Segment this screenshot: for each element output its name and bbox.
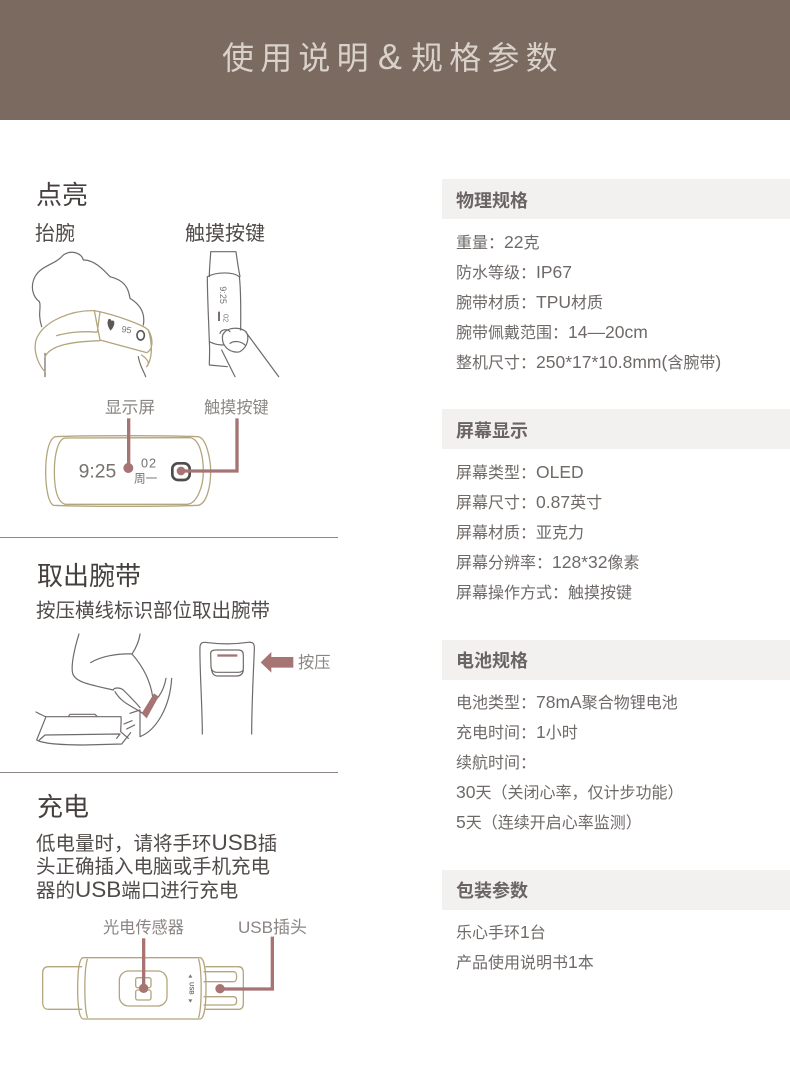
panel: charging	[36, 792, 307, 1019]
icon: strap back with press arrow	[200, 642, 293, 734]
spec list: 屏幕类型：OLED	[456, 462, 584, 482]
icon: touch key illustration: 02	[221, 314, 230, 322]
icon: USB charger illustration: USB	[188, 982, 194, 995]
label: USB plug: USB插头	[238, 918, 307, 937]
instruction text	[36, 830, 277, 902]
spec list: 防水等级：IP67	[456, 262, 572, 282]
panel: package contents	[442, 870, 790, 972]
label: touch key: 触摸按键	[204, 399, 269, 417]
spec list: 产品使用说明书1本	[456, 952, 594, 972]
spec list: 屏幕材质：亚克力	[456, 524, 584, 542]
icon: touch key illustration: 9:25	[218, 286, 228, 304]
panel: physical specs	[442, 179, 790, 372]
spec list: 电池类型：78mA聚合物锂电池	[456, 692, 678, 712]
spec list	[456, 692, 683, 832]
spec list: 屏幕分辨率：128*32像素	[456, 552, 640, 572]
header banner	[0, 0, 790, 120]
instruction text: 按压横线标识部位取出腕带	[36, 600, 270, 622]
spec list	[456, 232, 721, 372]
instruction text: 器的USB端口进行充电	[36, 877, 238, 902]
icon: removing strap illustration	[36, 634, 172, 745]
label: optical sensor: 光电传感器	[103, 919, 184, 937]
heading: package contents: 包装参数	[456, 880, 528, 901]
spec list: 整机尺寸：250*17*10.8mm(含腕带)	[456, 352, 721, 372]
panel: remove strap	[36, 561, 331, 745]
spec list: 腕带材质：TPU材质	[456, 292, 603, 312]
spec list: 重量：22克	[456, 232, 540, 252]
icon: touch key illustration	[207, 252, 279, 377]
label: display: 显示屏	[105, 398, 155, 417]
label: raise wrist: 抬腕	[35, 222, 75, 245]
icon: band front view with callouts: 9:25	[79, 461, 116, 482]
heading: remove strap: 取出腕带	[37, 561, 141, 591]
spec list: 30天（关闭心率，仅计步功能）	[456, 782, 683, 802]
heading: screen display: 屏幕显示	[456, 421, 528, 441]
icon: wrist illustration: 95	[121, 324, 132, 335]
panel: screen display	[442, 409, 790, 602]
spec list	[456, 922, 594, 972]
divider left 1	[0, 537, 338, 538]
icon: wrist illustration	[32, 252, 152, 377]
spec list: 充电时间：1小时	[456, 722, 578, 742]
spec list: 乐心手环1台	[456, 922, 546, 942]
heading: physical specs: 物理规格	[456, 191, 528, 211]
panel: light up	[32, 180, 279, 506]
title: 使用说明&规格参数	[222, 36, 564, 77]
spec list: 续航时间：	[456, 754, 536, 772]
icon: band front view with callouts	[46, 418, 237, 506]
instruction text: 低电量时，请将手环USB插	[36, 830, 277, 855]
spec list: 屏幕操作方式：触摸按键	[456, 584, 632, 602]
icon: USB charger illustration	[43, 937, 272, 1019]
instruction text: 头正确插入电脑或手机充电	[36, 856, 270, 878]
spec list: 腕带佩戴范围：14—20cm	[456, 322, 648, 342]
label: press: 按压	[298, 654, 331, 672]
heading: charging: 充电	[37, 792, 89, 822]
spec list	[456, 462, 640, 602]
heading: battery specs: 电池规格	[456, 651, 528, 671]
panel: battery specs	[442, 640, 790, 832]
spec list: 屏幕尺寸：0.87英寸	[456, 492, 602, 512]
heading: light up: 点亮	[36, 180, 88, 210]
icon: band front view with callouts: 周一	[134, 473, 158, 486]
icon: band front view with callouts: 02	[141, 457, 157, 471]
label: touch key: 触摸按键	[185, 222, 265, 245]
spec list: 5天（连续开启心率监测）	[456, 812, 642, 832]
